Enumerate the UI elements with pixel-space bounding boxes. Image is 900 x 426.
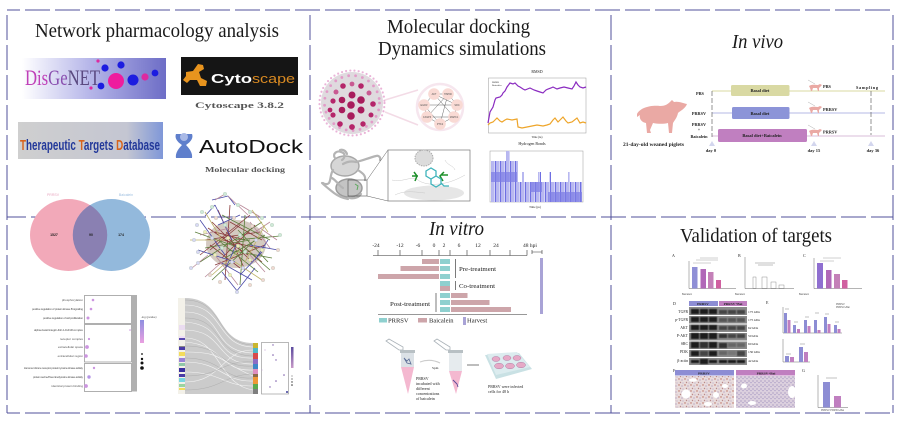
- bar chart G: G: [802, 368, 805, 373]
- panel: in vitro: [372, 218, 543, 401]
- study design timeline: [691, 80, 885, 153]
- timeline legend: PRRSV: [388, 318, 409, 324]
- venn diagram: 90: [89, 233, 93, 237]
- bar chart C: [799, 253, 862, 296]
- hub gene subnetwork: HSP90: [444, 93, 453, 96]
- bar chart E: PRRSV+Bai: [836, 306, 850, 309]
- western blot: TGFR: [678, 310, 688, 314]
- study design timeline: Basal diet: [751, 88, 770, 93]
- study design timeline: PRRSV: [823, 130, 838, 134]
- western blot: p-TGFR: [675, 318, 688, 322]
- text: incubation note: incubated with: [416, 381, 440, 386]
- western blot: SRC: [681, 342, 688, 346]
- text: plate note: [488, 384, 523, 394]
- GO enrichment bubble plot: extracellular space: [58, 345, 83, 349]
- treatment timeline: 0: [433, 243, 436, 249]
- study design timeline: day 15: [808, 148, 821, 153]
- GO enrichment bubble plot: positive regulation of cell proliferation: [43, 316, 83, 320]
- lung tissue sections: PRRSV+Bai: [757, 372, 775, 376]
- target interaction network: [320, 70, 384, 136]
- hub gene subnetwork: AKT: [432, 93, 437, 96]
- icon: weaned piglet: 21-day-old weaned piglets: [623, 143, 684, 148]
- hub gene subnetwork: EGFR: [421, 104, 428, 107]
- heading: validation of targets: Validation of targets: [680, 225, 832, 247]
- study design timeline: +: [698, 127, 701, 132]
- arrow: spin: Spin: [432, 366, 439, 370]
- bar chart B: B: [738, 253, 741, 258]
- text: incubation note: different: [416, 386, 431, 391]
- text: incubation note: of baicalein: [416, 396, 435, 401]
- lung tissue sections: F: [673, 368, 676, 373]
- panel: network pharmacology analysis: [18, 20, 304, 394]
- KEGG scatter plot: [262, 342, 294, 394]
- RMSD line chart: [488, 69, 586, 139]
- treatment timeline: -24: [372, 243, 380, 249]
- GO enrichment bubble plot: phosphorylation: [62, 298, 83, 302]
- hub gene subnetwork: SRC: [454, 104, 460, 107]
- heading: dynamics simulations: Dynamics simulations: [378, 38, 546, 60]
- logo: Therapeutic Targets Database: Therapeutic Targets Database: [20, 137, 160, 154]
- tube: after spin: [434, 339, 463, 394]
- western blot: P-AKT: [677, 334, 689, 338]
- timeline legend: Harvest: [467, 318, 487, 324]
- study design timeline: PRRSV: [692, 122, 707, 127]
- study design timeline: PBS: [823, 84, 831, 89]
- treatment timeline: -6: [416, 243, 421, 249]
- heading: in vitro: In vitro: [428, 218, 484, 240]
- RMSD line chart: RMSD: [492, 81, 499, 84]
- study design timeline: PRRSV: [692, 111, 707, 116]
- timeline legend: [379, 317, 487, 325]
- treatment timeline: 48 hpi: [523, 243, 537, 249]
- western blot: 60 kDa: [748, 342, 759, 346]
- hub gene subnetwork: CASP3: [423, 116, 432, 119]
- treatment timeline: Co-treatment: [459, 283, 495, 290]
- western blot: AKT: [680, 326, 689, 330]
- hydrogen bonds chart: Time (ps): [529, 205, 541, 209]
- logo: Cytoscape: Cytoscape 3.8.2: [195, 100, 284, 110]
- western blot: 130 kDa: [748, 350, 760, 354]
- GO enrichment bubble plot: alphav-beta3 integrin-IGF-1-IGF1R complex: [34, 328, 84, 332]
- venn diagram: 174: [118, 233, 124, 237]
- bar chart E: E: [766, 300, 769, 305]
- bar chart B: Baicalein: [735, 293, 746, 296]
- logo: AutoDock: Molecular docking: [205, 165, 285, 174]
- study design timeline: Sampling: [856, 85, 879, 90]
- venn diagram: [30, 193, 150, 271]
- GO enrichment bubble plot: -log (pvalue): [141, 315, 157, 319]
- protein and ligand docking view: [322, 150, 470, 201]
- GO enrichment bubble plot: receptor complex: [60, 337, 83, 341]
- treatment timeline: -12: [396, 243, 404, 249]
- GO enrichment bubble plot: identical protein binding: [51, 384, 83, 388]
- text: incubation note: PRRSV: [416, 376, 429, 381]
- bar chart E: PRRSV: [836, 303, 845, 306]
- treatment timeline: 2: [443, 243, 446, 249]
- western blot: 175 kDa: [748, 318, 760, 322]
- arrow: to plate: [467, 364, 479, 366]
- logo: Cytoscape: scape: [252, 71, 295, 86]
- sankey diagram: [178, 298, 258, 394]
- panel: molecular docking and dynamics: [320, 16, 586, 209]
- study design timeline: day 36: [867, 148, 880, 153]
- study design timeline: Basal diet: [751, 111, 770, 116]
- bar chart B: [735, 253, 794, 296]
- treatment timeline: 6: [458, 243, 461, 249]
- logo: AutoDock: [176, 133, 304, 174]
- treatment timeline: Pre-treatment: [459, 266, 496, 273]
- study design timeline: Basal diet+Baicalein: [742, 133, 782, 138]
- western blot: D: [673, 301, 676, 306]
- bar chart E: [766, 300, 850, 362]
- GO enrichment bubble plot: [24, 295, 157, 392]
- western blot: [673, 301, 760, 365]
- PPI network: [189, 192, 282, 294]
- GO enrichment bubble plot: positive regulation of protein kinase B signaling: [32, 307, 83, 311]
- heading: network pharmacology: Network pharmacology analysis: [35, 20, 279, 42]
- logo: AutoDock: AutoDock: [199, 137, 304, 157]
- GO enrichment bubble plot: transmembrane receptor protein tyrosine kinase activity: [24, 366, 84, 370]
- text: incubation note: [416, 376, 440, 401]
- text: incubation note: concentrations: [416, 391, 440, 396]
- hub gene subnetwork: MAPK1: [450, 116, 459, 119]
- venn diagram: Baicalein: [119, 193, 133, 197]
- western blot: 62 kDa: [748, 326, 759, 330]
- treatment timeline: Post-treatment: [390, 301, 430, 308]
- treatment timeline: [372, 243, 543, 314]
- bar chart A: [672, 253, 736, 296]
- bar chart A: Baicalein: [682, 293, 693, 296]
- hydrogen bonds chart: [490, 141, 583, 209]
- study design timeline: day 0: [706, 148, 717, 153]
- venn diagram: PRRSV: [47, 193, 60, 197]
- RMSD line chart: Baicalein: [492, 84, 502, 87]
- study design timeline: PRRSV: [823, 107, 838, 112]
- bar chart C: Baicalein: [799, 293, 810, 296]
- connector to hub genes: [385, 90, 418, 125]
- western blot: β-actin: [677, 359, 688, 363]
- icon: weaned piglet: [623, 100, 687, 148]
- western blot: 175 kDa: [748, 310, 760, 314]
- lung tissue sections: PRRSV: [698, 372, 710, 376]
- western blot: PI3K: [680, 350, 688, 354]
- panel: in vivo: [623, 31, 885, 153]
- lung tissue sections: [673, 368, 796, 408]
- treatment timeline: 24: [493, 243, 499, 249]
- venn diagram: 1527: [50, 233, 58, 237]
- RMSD line chart: RMSD: [531, 69, 543, 74]
- treatment timeline: 12: [475, 243, 481, 249]
- western blot: PRRSV: [697, 302, 709, 306]
- logo: DisGeNET: DisGeNET: [25, 65, 100, 90]
- logo: Therapeutic Targets Database: [18, 122, 163, 159]
- RMSD line chart: Time (ns): [532, 136, 542, 139]
- western blot: 42 kDa: [748, 359, 759, 363]
- timeline legend: Baicalein: [429, 318, 454, 324]
- study design timeline: PBS: [696, 91, 705, 96]
- hydrogen bonds chart: Hydrogen Bonds: [518, 141, 546, 146]
- heading: molecular docking: Molecular docking: [387, 16, 530, 38]
- bar chart C: C: [803, 253, 806, 258]
- heading: in vivo: In vivo: [731, 31, 783, 53]
- western blot: PRRSV+Bai: [724, 302, 742, 306]
- GO enrichment bubble plot: protein serine/threonine/tyrosine kinase activity: [33, 375, 84, 379]
- panel: validation of targets: [672, 225, 862, 412]
- culture plate: [485, 352, 532, 379]
- logo: DisGeNET: [22, 58, 166, 99]
- bar chart G: PRRSV PRRSV+Bai: [821, 409, 844, 412]
- text: plate note: PRRSV were infected: [488, 384, 523, 389]
- hub gene subnetwork: PTK2: [437, 123, 444, 126]
- GO enrichment bubble plot: extracellular region: [58, 354, 83, 358]
- bar chart G: [802, 368, 848, 412]
- tube: incubation: [386, 339, 415, 394]
- text: plate note: cells for 48 h: [488, 389, 509, 394]
- bar chart A: A: [672, 253, 675, 258]
- study design timeline: Baicalein: [691, 134, 708, 139]
- logo: Cytoscape: Cyto: [211, 71, 252, 86]
- arrow: spin: [420, 360, 440, 370]
- hub gene subnetwork: [417, 84, 463, 130]
- western blot: 50 kDa: [748, 334, 759, 338]
- logo: Cytoscape: [181, 57, 298, 110]
